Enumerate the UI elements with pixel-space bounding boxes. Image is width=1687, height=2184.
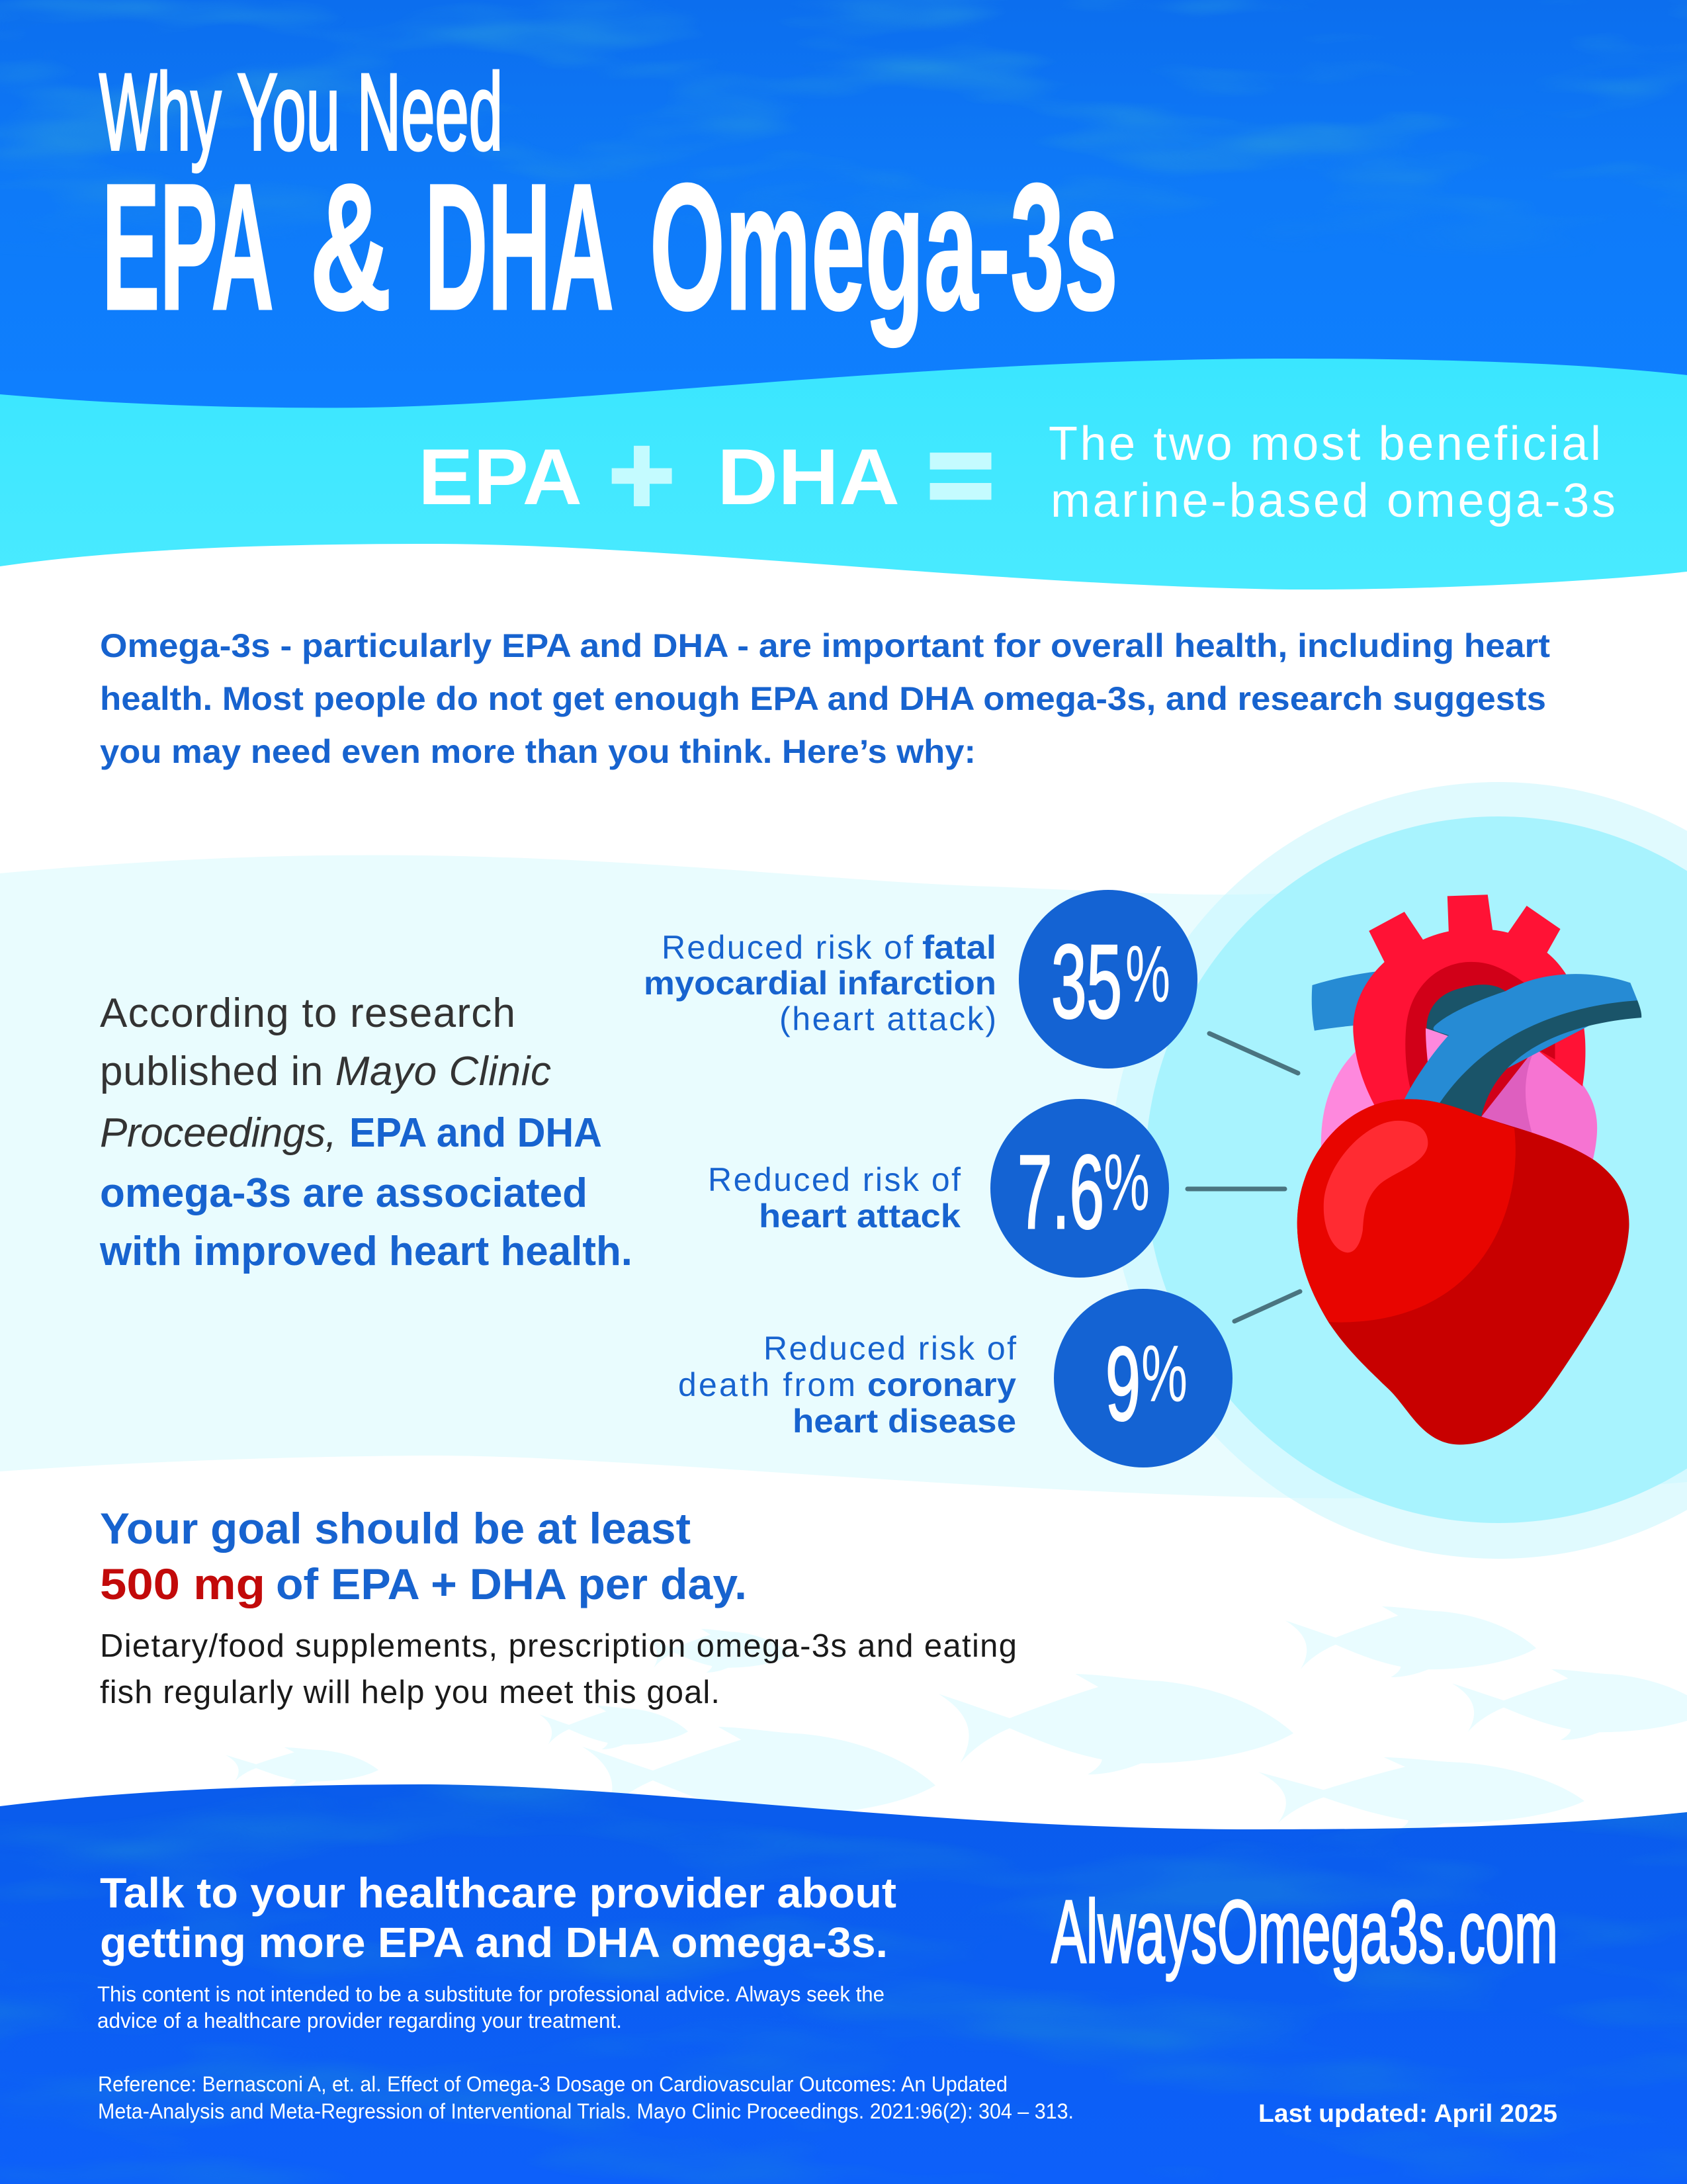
call to action: Talk to your healthcare provider about: [100, 1869, 896, 1917]
stat badge: 9%: [1054, 1289, 1233, 1467]
stat badge: 35%: [1019, 890, 1197, 1069]
dark pink atrium shade: [1480, 1048, 1535, 1133]
stat badge: 7.6%: 7.6: [1017, 1134, 1104, 1250]
goal heading: 500 mg: [100, 1559, 265, 1608]
stat label: 35%: myocardial infarction: [644, 965, 996, 1002]
equation: EPA + DHA =: =: [928, 412, 994, 538]
goal heading: [100, 1504, 747, 1608]
research statement: [99, 990, 632, 1274]
stat label: 9%: coronary: [867, 1366, 1016, 1403]
stat label: 7.6%: Reduced risk of: [708, 1161, 961, 1198]
dark blue rear vessel: [1426, 984, 1506, 1036]
dark red aorta inner: [1405, 962, 1555, 1119]
panel: pale research wave: [0, 855, 1687, 1499]
title: EPA: [102, 146, 274, 347]
stat badge: 35%: 35: [1051, 924, 1122, 1040]
stat badge: 9%: 9: [1105, 1326, 1141, 1442]
equation: EPA + DHA =: [418, 412, 994, 538]
research statement: published in Mayo Clinic: [100, 1049, 551, 1094]
call to action: getting more EPA and DHA omega-3s.: [100, 1919, 888, 1966]
research statement: with improved heart health.: [99, 1229, 632, 1274]
intro paragraph: Omega-3s - particularly EPA and DHA - are important for overall health, including heart: [100, 627, 1550, 664]
research statement: Proceedings,: [100, 1110, 337, 1156]
blue pulmonary artery: [1405, 974, 1637, 1104]
icon: heart: [1297, 895, 1641, 1445]
goal body text: [100, 1628, 1017, 1710]
equation: EPA + DHA =: DHA: [717, 433, 900, 521]
reference: [98, 2072, 1074, 2123]
fish silhouettes: [226, 1606, 1687, 1831]
pink left atrium: [1321, 1049, 1382, 1147]
title: &: [310, 146, 392, 347]
stat label: 7.6%: heart attack: [759, 1198, 961, 1235]
heart body shadow: [1297, 1099, 1629, 1445]
stat label: 9%: heart disease: [793, 1403, 1016, 1440]
title: DHA: [425, 146, 614, 347]
equation: EPA + DHA =: EPA: [418, 433, 582, 521]
intro paragraph: health. Most people do not get enough EPA and DHA omega-3s, and research suggests: [100, 680, 1546, 717]
footer water band: [0, 1780, 1687, 2184]
goal body text: fish regularly will help you meet this goal.: [100, 1675, 720, 1710]
pink gap: [1426, 1028, 1449, 1072]
title: Omega-3s: [650, 146, 1118, 348]
disclaimer: This content is not intended to be a substitute for professional advice. Always seek the: [97, 1982, 885, 2006]
call to action: [100, 1869, 896, 1966]
intro paragraph: you may need even more than you think. Here’s why:: [100, 733, 976, 770]
stat label: 7.6%: [708, 1161, 961, 1235]
goal body text: Dietary/food supplements, prescription omega-3s and eating: [100, 1628, 1017, 1664]
stat label: 35%: (heart attack): [779, 1000, 996, 1037]
blue left vessel: [1312, 971, 1378, 1031]
research statement: According to research: [100, 990, 515, 1036]
equation: EPA + DHA =: +: [609, 412, 675, 538]
pink right atrium: [1480, 1048, 1597, 1160]
red aorta: [1353, 895, 1585, 1119]
stat badge: 7.6%: %: [1103, 1137, 1150, 1227]
stat badge: 35%: %: [1125, 929, 1170, 1019]
connector lines: [1188, 1033, 1300, 1321]
title: Why You Need: [99, 51, 503, 173]
disclaimer: advice of a healthcare provider regarding your treatment.: [97, 2009, 622, 2032]
cyan wave band: [0, 359, 1687, 590]
stat label: 35%: [644, 929, 996, 1037]
stat label: 35%: fatal: [922, 929, 996, 966]
reference: Reference: Bernasconi A, et. al. Effect of Omega-3 Dosage on Cardiovascular Outcomes: An Updated: [98, 2072, 1008, 2096]
stat label: 9%: [678, 1330, 1016, 1440]
circle backdrop behind heart: [1110, 782, 1687, 1559]
goal heading: of EPA + DHA per day.: [276, 1559, 747, 1608]
heart body light: [1297, 1099, 1516, 1323]
equation result text: [1049, 417, 1616, 527]
title: [99, 51, 1118, 348]
stat badge: 7.6%: [990, 1099, 1169, 1278]
stat label: 9%: Reduced risk of: [763, 1330, 1016, 1367]
research statement: EPA and DHA: [349, 1110, 602, 1156]
stat label: 9%: death from: [678, 1366, 855, 1403]
header water band: [0, 0, 1687, 423]
goal heading: Your goal should be at least: [100, 1504, 691, 1553]
last updated: Last updated: April 2025: [1258, 2100, 1557, 2128]
stat label: 35%: Reduced risk of: [662, 929, 913, 966]
heart highlight: [1324, 1121, 1428, 1252]
disclaimer: [97, 1982, 885, 2032]
equation result text: marine-based omega-3s: [1051, 474, 1616, 527]
dark blue artery underside: [1439, 1000, 1641, 1118]
research statement: omega-3s are associated: [100, 1170, 587, 1216]
intro paragraph: [100, 627, 1550, 770]
stat badge: 9%: %: [1141, 1329, 1188, 1419]
equation result text: The two most beneficial: [1049, 417, 1601, 470]
reference: Meta-Analysis and Meta-Regression of Interventional Trials. Mayo Clinic Proceedings. 2021:96(2): 304 – 313.: [98, 2099, 1074, 2123]
